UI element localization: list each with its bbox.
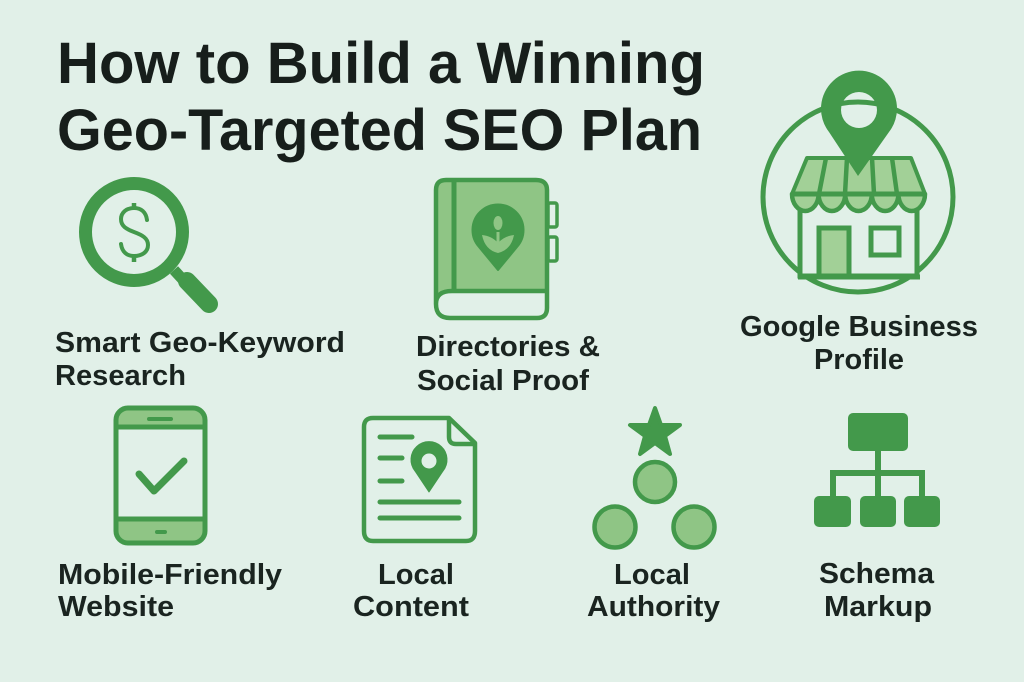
label: Local Content (353, 559, 469, 623)
label: Smart Geo-Keyword Research (55, 327, 345, 392)
icon: magnifying glass with dollar sign (86, 184, 209, 304)
label: Schema Markup: Markup (824, 591, 932, 623)
label: Mobile-Friendly Website: Website (58, 591, 174, 623)
label: Directories & Social Proof: Social Proof (417, 365, 589, 397)
label: Local Authority (587, 559, 720, 623)
label: Google Business Profile: Google Business (740, 311, 978, 343)
map pin (821, 71, 897, 176)
label: Directories & Social Proof (416, 331, 600, 397)
label: Local Authority: Local (614, 559, 690, 591)
label: Mobile-Friendly Website: Mobile-Friendly (58, 559, 282, 591)
label: Smart Geo-Keyword Research: Smart Geo-Keyword (55, 327, 345, 359)
icon: hierarchy diagram (814, 413, 940, 527)
title: Geo-Targeted SEO Plan (57, 98, 702, 163)
title: How to Build a Winning (57, 31, 705, 96)
label: Directories & Social Proof: Directories & (416, 331, 600, 363)
icon: directory book (436, 180, 557, 318)
icon: smartphone with check mark (116, 408, 205, 543)
label: Schema Markup (819, 558, 935, 623)
icon: storefront with map pin in circle (763, 71, 953, 292)
icon: document with map pin (364, 418, 475, 541)
label: Mobile-Friendly Website (58, 559, 282, 623)
label: Local Authority: Authority (587, 591, 720, 623)
label: Smart Geo-Keyword Research: Research (55, 360, 186, 392)
shop building (798, 205, 920, 277)
awning (792, 158, 925, 211)
label: Local Content: Content (353, 591, 469, 623)
label: Local Content: Local (378, 559, 454, 591)
label: Google Business Profile: Profile (814, 344, 904, 376)
label: Schema Markup: Schema (819, 558, 935, 590)
label: Google Business Profile (740, 311, 978, 376)
title (57, 31, 705, 163)
icon: star above three circles (594, 408, 714, 548)
